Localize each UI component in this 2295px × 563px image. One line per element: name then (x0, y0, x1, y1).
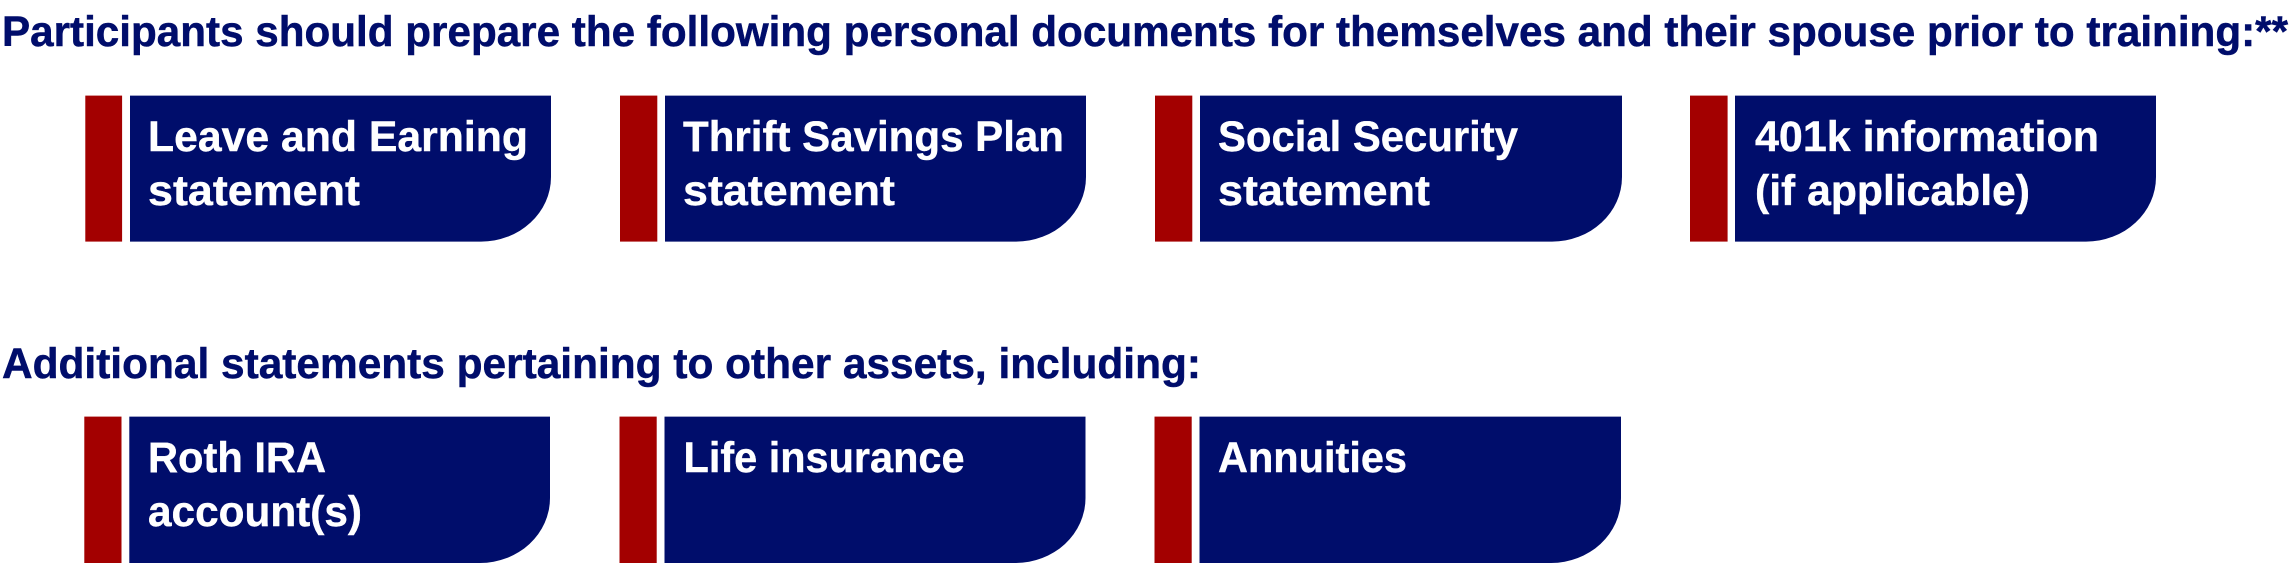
card text: (if applicable) (1755, 167, 2030, 215)
card: 401k information (1690, 96, 2156, 242)
card: Life insurance (620, 417, 1086, 563)
heading: additional statements: Additional statements pertaining to other assets, including: (2, 341, 1201, 388)
card text (148, 434, 362, 536)
red bar (1154, 417, 1192, 563)
card text: account(s) (148, 488, 362, 536)
card: Roth IRA account(s) (84, 417, 550, 563)
navy panel (1200, 96, 1622, 242)
card: Leave and Earning statement (85, 96, 551, 242)
navy panel (665, 96, 1086, 242)
navy panel (1200, 417, 1621, 563)
card text: Thrift Savings Plan (683, 113, 1064, 161)
card text: statement (683, 167, 895, 215)
card text: Life insurance (684, 434, 964, 482)
red bar (620, 96, 657, 242)
navy panel (130, 96, 551, 242)
card text: Social Security (1218, 113, 1518, 161)
card text: Annuities (1218, 434, 1407, 482)
card text: statement (1218, 167, 1430, 215)
red bar (620, 417, 657, 563)
card: Thrift Savings Plan statement (620, 96, 1086, 242)
card text: statement (148, 167, 360, 215)
red bar (1155, 96, 1192, 242)
red bar (84, 417, 122, 563)
card text (1218, 113, 1518, 215)
card: Annuities (1154, 417, 1621, 563)
card text: 401k information (1755, 113, 2099, 161)
red bar (85, 96, 122, 242)
card text (683, 113, 1064, 215)
red bar (1690, 96, 1728, 242)
navy panel (129, 417, 550, 563)
card text (148, 113, 528, 215)
card text (1755, 113, 2099, 215)
card text: Roth IRA (148, 434, 326, 482)
navy panel (664, 417, 1086, 563)
navy panel (1735, 96, 2156, 242)
heading: personal documents: Participants should prepare the following personal documents for themselves and their spouse prior to training:** (2, 9, 2288, 56)
card: Social Security statement (1155, 96, 1622, 242)
card text: Leave and Earning (148, 113, 528, 161)
